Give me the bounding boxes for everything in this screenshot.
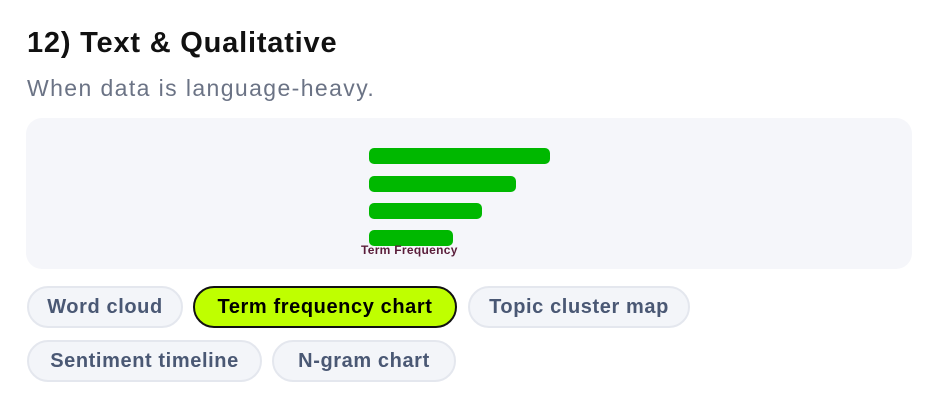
- subtitle: When data is language-heavy.: [27, 75, 375, 101]
- pill: Topic cluster map: Topic cluster map: [489, 296, 669, 318]
- panel: chart: [26, 118, 912, 269]
- pill: Term frequency chart (active): [193, 286, 457, 328]
- pill: N-gram chart: N-gram chart: [298, 350, 430, 372]
- pill: Word cloud: [27, 286, 183, 328]
- pill: N-gram chart: [272, 340, 456, 382]
- bar chart: term frequency: Term Frequency: [361, 243, 458, 257]
- pill: Sentiment timeline: Sentiment timeline: [50, 350, 239, 372]
- title: 12) Text & Qualitative: [27, 27, 337, 59]
- bar chart: term frequency: [361, 148, 550, 257]
- pill: Term frequency chart (active): Term frequency chart: [217, 296, 433, 318]
- pill: Sentiment timeline: [27, 340, 262, 382]
- pill: Topic cluster map: [468, 286, 690, 328]
- pill: Word cloud: Word cloud: [47, 296, 163, 318]
